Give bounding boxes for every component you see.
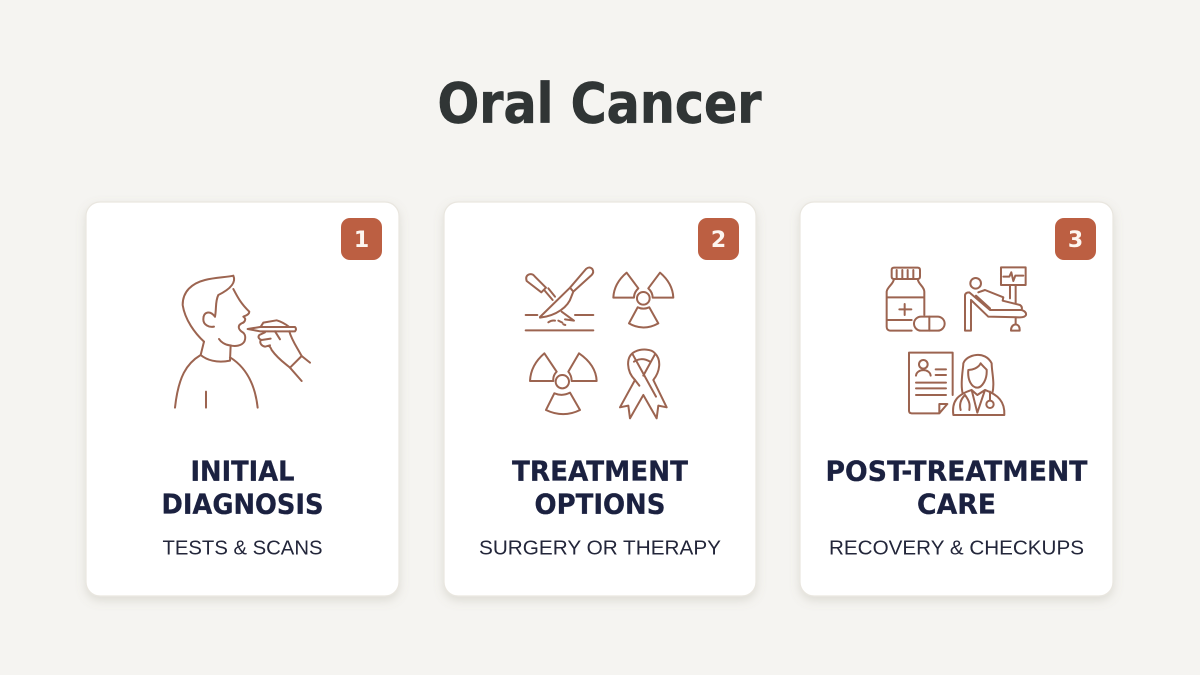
heading: INITIAL xyxy=(190,456,294,488)
heading xyxy=(826,456,1088,520)
subheading: RECOVERY & CHECKUPS xyxy=(829,536,1084,560)
heading xyxy=(162,456,324,520)
panel: initial diagnosis xyxy=(86,202,399,596)
subheading: TESTS & SCANS xyxy=(162,536,322,560)
step badge 3: 3 xyxy=(1068,228,1083,253)
step badge 1: 1 xyxy=(354,228,369,253)
title: Oral Cancer xyxy=(438,72,762,136)
step badge 1 xyxy=(341,218,382,260)
subheading: SURGERY OR THERAPY xyxy=(479,536,721,560)
icon: medical record xyxy=(909,353,953,413)
icon: throat swab examination xyxy=(175,276,310,408)
icon: radiation xyxy=(613,273,673,327)
panel: treatment options xyxy=(444,202,756,596)
heading xyxy=(512,456,688,520)
step badge 2: 2 xyxy=(711,228,726,253)
icon: patient in bed xyxy=(965,267,1026,331)
icon: medicine bottle xyxy=(887,268,945,331)
heading: DIAGNOSIS xyxy=(162,488,324,520)
heading: CARE xyxy=(917,488,996,520)
step badge 2 xyxy=(698,218,739,260)
icon: radiation 2 xyxy=(530,353,597,414)
heading: POST-TREATMENT xyxy=(826,456,1088,488)
step badge 3 xyxy=(1055,218,1096,260)
heading: OPTIONS xyxy=(534,488,666,520)
icon: surgery, radiation and ribbon xyxy=(526,267,673,418)
icon: scalpel xyxy=(526,267,593,330)
icon: doctor xyxy=(953,355,1004,415)
panel: post-treatment care xyxy=(800,202,1113,596)
icon: awareness ribbon xyxy=(620,350,667,418)
heading: TREATMENT xyxy=(512,456,688,488)
icon: care xyxy=(887,267,1026,415)
